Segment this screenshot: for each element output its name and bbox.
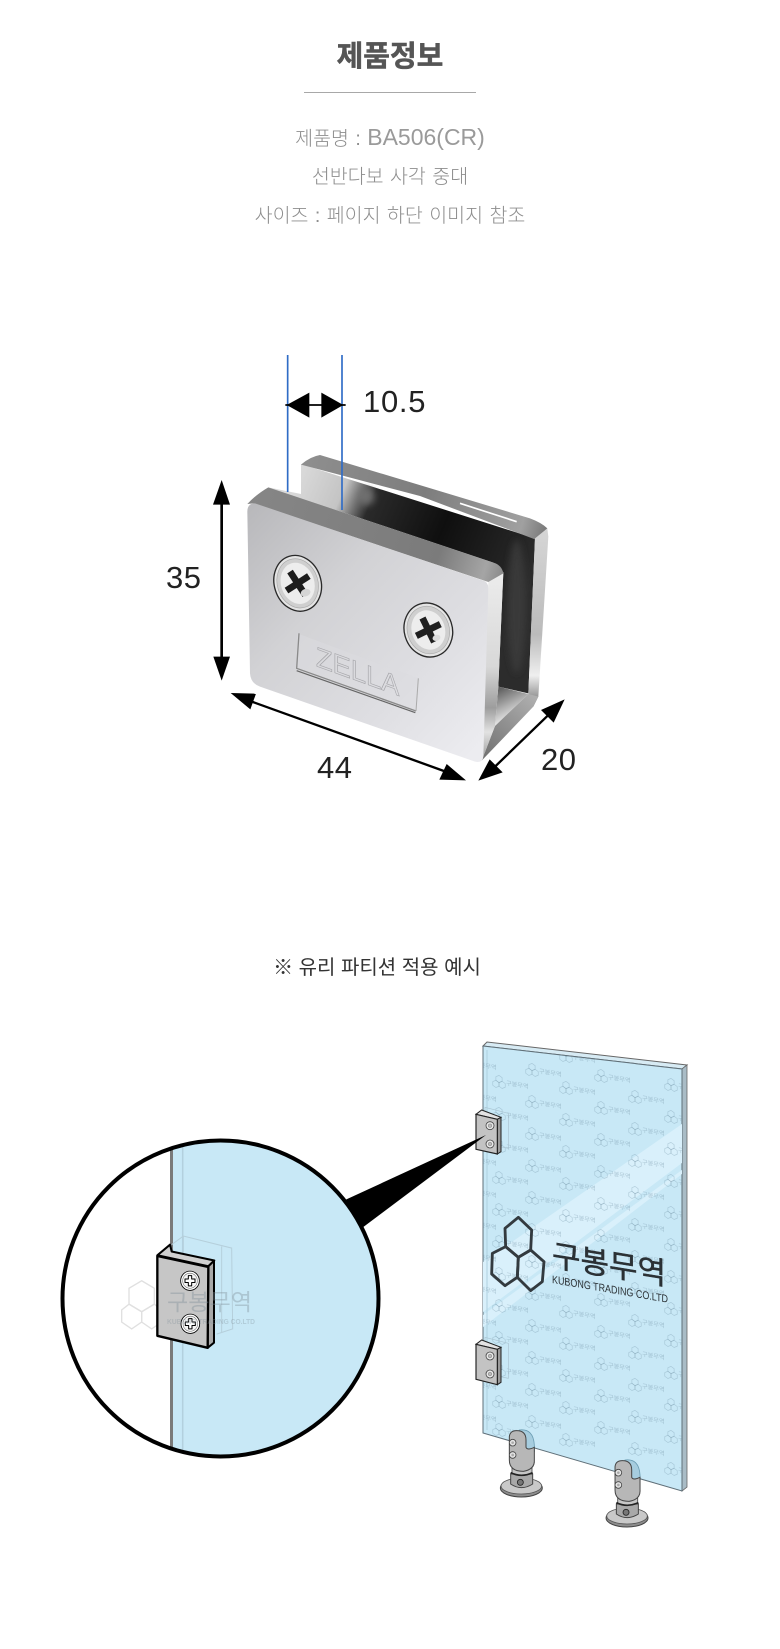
panel watermarks: 구봉무역 <box>474 1412 497 1424</box>
dimension label 10.5: 10.5 <box>363 384 426 419</box>
screw left <box>267 549 329 617</box>
dimension label 35: 35 <box>166 560 201 595</box>
panel watermarks: 구봉무역 <box>539 1067 562 1079</box>
panel watermarks: 구봉무역 <box>474 1092 497 1104</box>
panel watermarks: 구봉무역 <box>678 1370 701 1382</box>
ghost logo subtitle: KUBONG TRADING CO.LTD <box>167 1319 255 1326</box>
panel top edge <box>483 1042 687 1069</box>
lower mini bracket <box>476 1337 508 1385</box>
panel watermarks: 구봉무역 <box>678 1338 701 1350</box>
panel watermarks: 구봉무역 <box>678 1402 701 1414</box>
panel watermarks: 구봉무역 <box>474 1284 497 1296</box>
bracket screw bottom <box>181 1314 200 1333</box>
panel face <box>483 1046 682 1491</box>
panel watermarks: 구봉무역 <box>573 1245 596 1257</box>
interior mottling <box>359 488 526 673</box>
panel watermarks: 구봉무역 <box>642 1414 665 1426</box>
panel watermarks: 구봉무역 <box>573 1373 596 1385</box>
panel watermarks: 구봉무역 <box>608 1329 631 1341</box>
logo wordmark: 구봉무역 <box>552 1238 666 1292</box>
panel watermarks: 구봉무역 <box>608 1105 631 1117</box>
panel watermarks: 구봉무역 <box>474 1220 497 1232</box>
panel watermarks: 구봉무역 <box>608 1137 631 1149</box>
panel watermarks: 구봉무역 <box>506 1239 529 1251</box>
panel watermarks: 구봉무역 <box>573 1117 596 1129</box>
right floor stand <box>606 1460 648 1527</box>
arrow: width 10.5 <box>285 393 346 418</box>
panel watermarks: 구봉무역 <box>506 1111 529 1123</box>
title: 제품정보 <box>337 41 443 73</box>
panel watermarks: 구봉무역 <box>474 1124 497 1136</box>
size note: 사이즈 : 페이지 하단 이미지 참조 <box>255 205 525 227</box>
panel watermarks: 구봉무역 <box>642 1446 665 1458</box>
panel watermarks: 구봉무역 <box>506 1271 529 1283</box>
panel watermarks: 구봉무역 <box>608 1361 631 1373</box>
panel watermarks: 구봉무역 <box>608 1297 631 1309</box>
panel watermarks: 구봉무역 <box>573 1309 596 1321</box>
panel watermarks: 구봉무역 <box>642 1318 665 1330</box>
illustrations canvas <box>60 355 688 1528</box>
panel watermarks: 구봉무역 <box>539 1419 562 1431</box>
panel watermarks: 구봉무역 <box>608 1201 631 1213</box>
panel watermarks: 구봉무역 <box>474 1156 497 1168</box>
panel watermarks: 구봉무역 <box>608 1393 631 1405</box>
panel watermarks: 구봉무역 <box>573 1213 596 1225</box>
clamp rear plate inner face <box>268 464 535 693</box>
blue width guide lines <box>288 355 342 510</box>
panel watermarks: 구봉무역 <box>642 1158 665 1170</box>
dimension label 44: 44 <box>317 750 352 785</box>
panel watermarks: 구봉무역 <box>506 1427 529 1439</box>
product photo: glass clamp <box>213 355 565 781</box>
panel watermarks: 구봉무역 <box>573 1181 596 1193</box>
ghost logo wordmark: 구봉무역 <box>167 1289 252 1315</box>
panel watermarks: 구봉무역 <box>573 1053 596 1065</box>
dimension label 20: 20 <box>541 742 576 777</box>
clamp rear plate side <box>528 528 548 707</box>
panel watermarks: 구봉무역 <box>678 1114 701 1126</box>
detail magnifier circle <box>62 1130 393 1470</box>
panel watermarks: 구봉무역 <box>573 1437 596 1449</box>
panel watermarks: 구봉무역 <box>678 1466 701 1478</box>
panel watermarks: 구봉무역 <box>539 1259 562 1271</box>
panel watermarks: 구봉무역 <box>573 1085 596 1097</box>
panel watermarks: 구봉무역 <box>573 1341 596 1353</box>
engraved ZELLA text: ZELLA <box>316 642 400 703</box>
panel watermarks: 구봉무역 <box>506 1303 529 1315</box>
screw right <box>397 597 460 663</box>
panel watermarks: 구봉무역 <box>678 1306 701 1318</box>
arrow: depth 20 <box>478 699 565 781</box>
clamp front plate face <box>247 503 488 762</box>
clamp lower body <box>482 694 538 761</box>
magnifier ring <box>62 1140 378 1456</box>
panel highlight stripes <box>483 1124 682 1327</box>
panel watermarks: 구봉무역 <box>573 1405 596 1417</box>
logo hexagons <box>492 1217 544 1291</box>
panel watermarks: 구봉무역 <box>678 1242 701 1254</box>
glass partition panel <box>482 1042 688 1492</box>
panel watermarks: 구봉무역 <box>474 1316 497 1328</box>
callout pointer <box>345 1135 486 1228</box>
panel watermarks: 구봉무역 <box>506 1079 529 1091</box>
magnified glass area <box>173 1142 376 1454</box>
product description: 선반다보 사각 중대 <box>312 166 468 188</box>
Kubong logo on panel <box>492 1217 668 1306</box>
panel watermarks: 구봉무역 <box>678 1210 701 1222</box>
panel side edge <box>682 1065 687 1491</box>
left floor stand <box>500 1430 542 1497</box>
panel watermarks: 구봉무역 <box>539 1291 562 1303</box>
panel watermarks: 구봉무역 <box>642 1286 665 1298</box>
clamp channel floor <box>495 687 528 726</box>
panel watermarks: 구봉무역 <box>506 1367 529 1379</box>
arrow: height 35 <box>213 480 230 681</box>
panel watermarks: 구봉무역 <box>642 1126 665 1138</box>
panel watermarks: 구봉무역 <box>608 1169 631 1181</box>
panel watermarks: 구봉무역 <box>539 1195 562 1207</box>
panel watermarks: 구봉무역 <box>506 1207 529 1219</box>
panel watermarks: 구봉무역 <box>539 1131 562 1143</box>
clamp rear plate rim <box>301 455 547 539</box>
panel watermarks: 구봉무역 <box>608 1233 631 1245</box>
magnified bracket <box>157 1245 214 1348</box>
panel watermarks: 구봉무역 <box>474 1060 497 1072</box>
panel watermarks: 구봉무역 <box>539 1163 562 1175</box>
panel watermarks: 구봉무역 <box>506 1335 529 1347</box>
panel watermarks: 구봉무역 <box>539 1387 562 1399</box>
panel watermarks: 구봉무역 <box>642 1254 665 1266</box>
panel watermarks: 구봉무역 <box>573 1277 596 1289</box>
panel watermarks: 구봉무역 <box>678 1146 701 1158</box>
panel watermarks: 구봉무역 <box>608 1425 631 1437</box>
arrow: length 44 <box>231 693 466 780</box>
product name: 제품명 : BA506(CR) <box>295 124 485 150</box>
bracket screw top <box>181 1271 199 1290</box>
ghost bracket and hexagons <box>122 1236 233 1334</box>
panel watermarks: 구봉무역 <box>678 1434 701 1446</box>
panel watermarks: 구봉무역 <box>642 1382 665 1394</box>
panel watermarks: 구봉무역 <box>539 1099 562 1111</box>
clamp front plate top <box>247 487 503 582</box>
panel watermarks: 구봉무역 <box>474 1380 497 1392</box>
upper mini bracket <box>476 1107 508 1154</box>
panel watermarks: 구봉무역 <box>642 1190 665 1202</box>
logo subtitle: KUBONG TRADING CO.LTD <box>552 1274 668 1306</box>
title divider <box>304 92 476 93</box>
panel watermarks: 구봉무역 <box>608 1073 631 1085</box>
nameplate recess <box>296 633 418 713</box>
panel watermarks: 구봉무역 <box>642 1094 665 1106</box>
panel watermarks: 구봉무역 <box>474 1252 497 1264</box>
example caption: ※ 유리 파티션 적용 예시 <box>273 957 481 979</box>
panel watermarks: 구봉무역 <box>678 1274 701 1286</box>
panel watermarks: 구봉무역 <box>608 1265 631 1277</box>
panel watermarks: 구봉무역 <box>642 1222 665 1234</box>
panel watermarks: 구봉무역 <box>474 1348 497 1360</box>
panel watermarks: 구봉무역 <box>474 1188 497 1200</box>
panel watermarks: 구봉무역 <box>539 1227 562 1239</box>
clamp front plate side <box>482 572 503 761</box>
panel watermarks: 구봉무역 <box>678 1082 701 1094</box>
panel watermarks: 구봉무역 <box>678 1178 701 1190</box>
panel watermarks: 구봉무역 <box>573 1149 596 1161</box>
panel watermarks: 구봉무역 <box>642 1350 665 1362</box>
panel watermarks <box>483 1055 682 1476</box>
panel watermarks: 구봉무역 <box>506 1399 529 1411</box>
panel watermarks: 구봉무역 <box>506 1143 529 1155</box>
panel watermarks: 구봉무역 <box>539 1323 562 1335</box>
panel watermarks: 구봉무역 <box>539 1355 562 1367</box>
panel watermarks: 구봉무역 <box>506 1175 529 1187</box>
